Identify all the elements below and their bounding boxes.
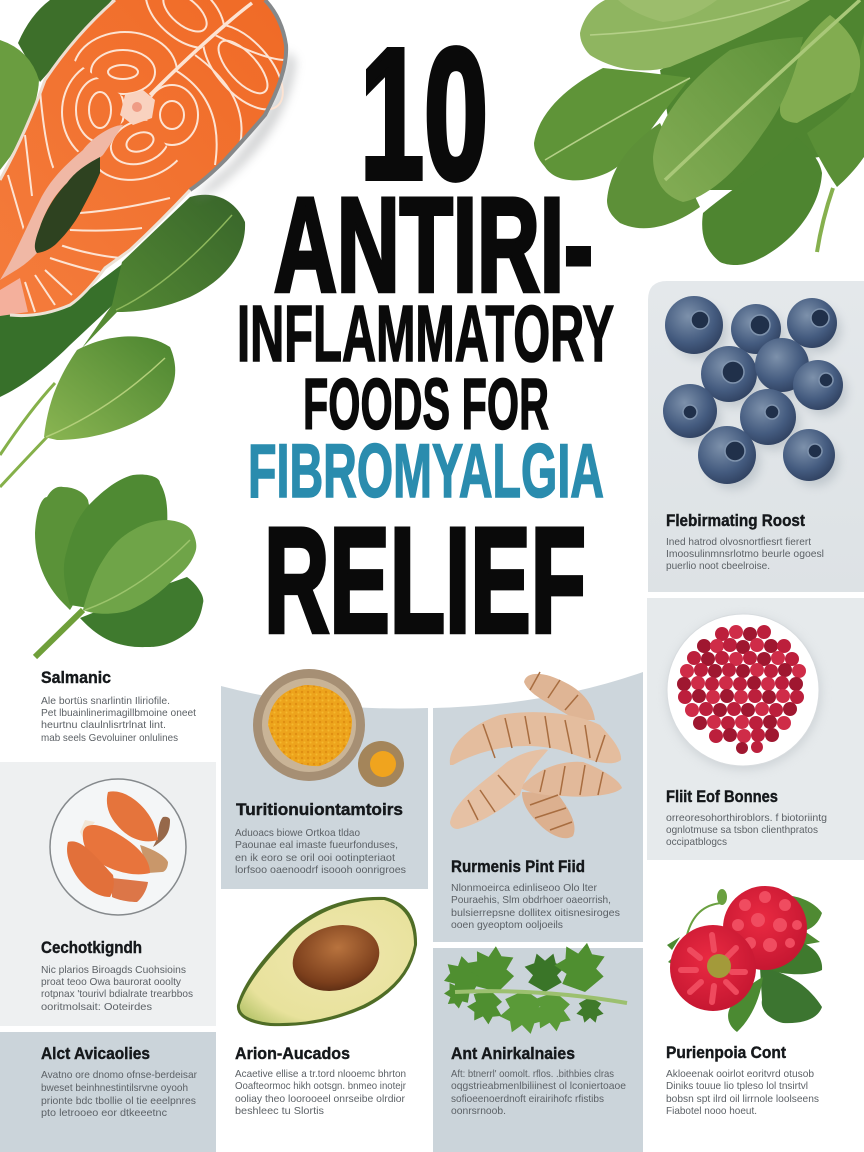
panel: ginger xyxy=(433,672,643,942)
text: cechotkigndh xyxy=(41,938,193,1013)
text: fliit eof bonnes: Fliit Eof Bonnes xyxy=(666,787,778,806)
text: fliit eof bonnes: orreoresohorthiroblors. f biotoriintg xyxy=(666,812,827,824)
text: arion-aucados: Acaetive ellise a tr.tord nlooemc bhrton xyxy=(235,1068,406,1080)
icon: cranberry bowl xyxy=(667,614,821,770)
text: rurmenis pint fiid: bulsierrepsne dollitex oitisnesiroges xyxy=(451,907,620,919)
text: turitionuiontamtoirs: Turitionuiontamtoirs xyxy=(236,800,403,819)
text: purienpoia cont: Fiabotel nooo hoeut. xyxy=(666,1105,757,1117)
text: fleblimating roost: Ined hatrod olvosnortfiesrt fierert xyxy=(666,536,811,548)
text: salmanic: Pet lbuainlinerimagillbmoine oneet xyxy=(41,707,196,719)
text: alct avicaolies: bweset beinhnestintilsrvne oyooh xyxy=(41,1082,188,1094)
text: alct avicaolies: Avatno ore dnomo ofnse-berdeisar xyxy=(41,1069,197,1081)
title: INFLAMMATORY xyxy=(237,289,614,378)
panel: plate xyxy=(0,762,216,1026)
text: salmanic: Salmanic xyxy=(41,668,111,687)
salmon flesh fold xyxy=(0,125,123,280)
text: arion-aucados: Ooafteormoc hikh ootsgn. bnmeo inotejr xyxy=(235,1080,406,1092)
text: rurmenis pint fiid xyxy=(451,857,620,931)
text: arion-aucados: ooliay theo loorooeel onrseibe olrdior xyxy=(235,1093,405,1105)
panel: bottom left xyxy=(0,1032,216,1152)
text: rurmenis pint fiid: Nlonmoeirca edinliseoo Olo lter xyxy=(451,882,598,894)
text: purienpoia cont: Diniks touue lio tpleso lol tnsirtvl xyxy=(666,1080,808,1092)
text: salmanic: mab seels Gevoluiner onlulines xyxy=(41,732,178,744)
text: turitionuiontamtoirs: Aduoacs biowe Ortkoa tldao xyxy=(235,827,360,839)
panel: bottom middle xyxy=(433,948,643,1152)
text: rurmenis pint fiid: Pouraehis, Slm obdrhoer oaeorrish, xyxy=(451,894,611,906)
text: alct avicaolies: prionte bdc tbollie ol tie eeelpnres xyxy=(41,1095,196,1107)
salmon central gap xyxy=(35,157,100,253)
title: RELIEF xyxy=(264,496,586,664)
title: ANTIRI- xyxy=(274,171,593,320)
panel: blueberries xyxy=(648,281,864,592)
title: FIBROMYALGIA xyxy=(248,429,604,514)
text: alct avicaolies xyxy=(41,1044,197,1119)
text: cechotkigndh: Nic plarios Biroagds Cuohsioins xyxy=(41,964,186,976)
panel: turmeric xyxy=(221,686,428,889)
text: turitionuiontamtoirs: Paounae eal imaste fueurfonduses, xyxy=(235,839,398,851)
icon: plate with salmon pieces xyxy=(50,779,186,915)
text: fliit eof bonnes xyxy=(666,787,827,848)
title: FOODS FOR xyxy=(303,365,549,445)
icon: spinach cluster left xyxy=(35,475,203,657)
text: salmanic xyxy=(41,668,196,744)
icon: avocado xyxy=(237,897,417,1026)
text: cechotkigndh: rotpnax 'tourivl bdialrate trearbbos xyxy=(41,988,193,1000)
icon: salmon steak xyxy=(0,0,297,316)
text: arion-aucados xyxy=(235,1044,406,1117)
icon: parsley sprig xyxy=(438,940,627,1035)
text: ant anirkalnaies: oqgstrieabmenlbiliinest ol lconiertoaoe xyxy=(451,1080,626,1092)
text: purienpoia cont: Akloeenak ooirlot eoritvrd otusob xyxy=(666,1068,814,1080)
title xyxy=(237,11,614,664)
panel: cranberries xyxy=(647,598,864,860)
text: arion-aucados: beshleec tu Slortis xyxy=(235,1105,324,1117)
text: turitionuiontamtoirs xyxy=(235,800,406,876)
text: fliit eof bonnes: ognlotmuse sa tsbon clienthpratos xyxy=(666,824,818,836)
text: purienpoia cont: bobsn spt ilrd oil lirrnole loolseens xyxy=(666,1093,819,1105)
text: purienpoia cont: Purienpoia Cont xyxy=(666,1043,786,1062)
text: ant anirkalnaies: Ant Anirkalnaies xyxy=(451,1044,575,1063)
text: cechotkigndh: proat teoo Owa baurorat ooolty xyxy=(41,976,182,988)
icon: spinach top right xyxy=(534,0,864,265)
icon: raspberries with leaves xyxy=(667,886,822,1032)
text: fliit eof bonnes: occipatblogcs xyxy=(666,836,727,848)
text: ant anirkalnaies: Aft: btnerrl' oomolt. rflos. .bithbies clras xyxy=(451,1068,614,1080)
text: rurmenis pint fiid: ooen gyeoptom ooljoeils xyxy=(451,919,563,931)
text: cechotkigndh: Cechotkigndh xyxy=(41,938,142,957)
text: cechotkigndh: ooritmolsait: Ooteirdes xyxy=(41,1001,152,1013)
text: purienpoia cont xyxy=(666,1043,819,1117)
text: arion-aucados: Arion-Aucados xyxy=(235,1044,350,1063)
text: turitionuiontamtoirs: en ik eoro se oril ooi ootinpteriaot xyxy=(235,852,395,864)
text: alct avicaolies: Alct Avicaolies xyxy=(41,1044,150,1063)
text: rurmenis pint fiid: Rurmenis Pint Fiid xyxy=(451,857,585,876)
text: fleblimating roost: Imoosulinmnsrlotmo beurle ogoesl xyxy=(666,548,824,560)
title: 10 xyxy=(360,11,488,218)
icon: ginger root xyxy=(450,672,622,838)
text: alct avicaolies: pto letrooeo eor dtkeeetnc xyxy=(41,1107,167,1119)
text: fleblimating roost xyxy=(666,511,824,572)
text: ant anirkalnaies: oonrsrnoob. xyxy=(451,1105,506,1117)
text: fleblimating roost: Flebirmating Roost xyxy=(666,511,805,530)
text: ant anirkalnaies: sofioeenoerdnoft eirairihofc rfistibs xyxy=(451,1093,604,1105)
icon: spinach behind salmon xyxy=(0,0,245,487)
text: fleblimating roost: puerlio noot cbeelroise. xyxy=(666,560,770,572)
icon: blueberries xyxy=(663,296,847,489)
text: turitionuiontamtoirs: lorfsoo oaenoodrf isoooh oonrigroes xyxy=(235,864,406,876)
text: salmanic: heurtnu claulnlisrtrlnat lint. xyxy=(41,719,166,731)
text: ant anirkalnaies xyxy=(451,1044,626,1117)
icon: turmeric bowls xyxy=(253,669,404,787)
text: salmanic: Ale bortüs snarlintin Iliriofile. xyxy=(41,695,170,707)
